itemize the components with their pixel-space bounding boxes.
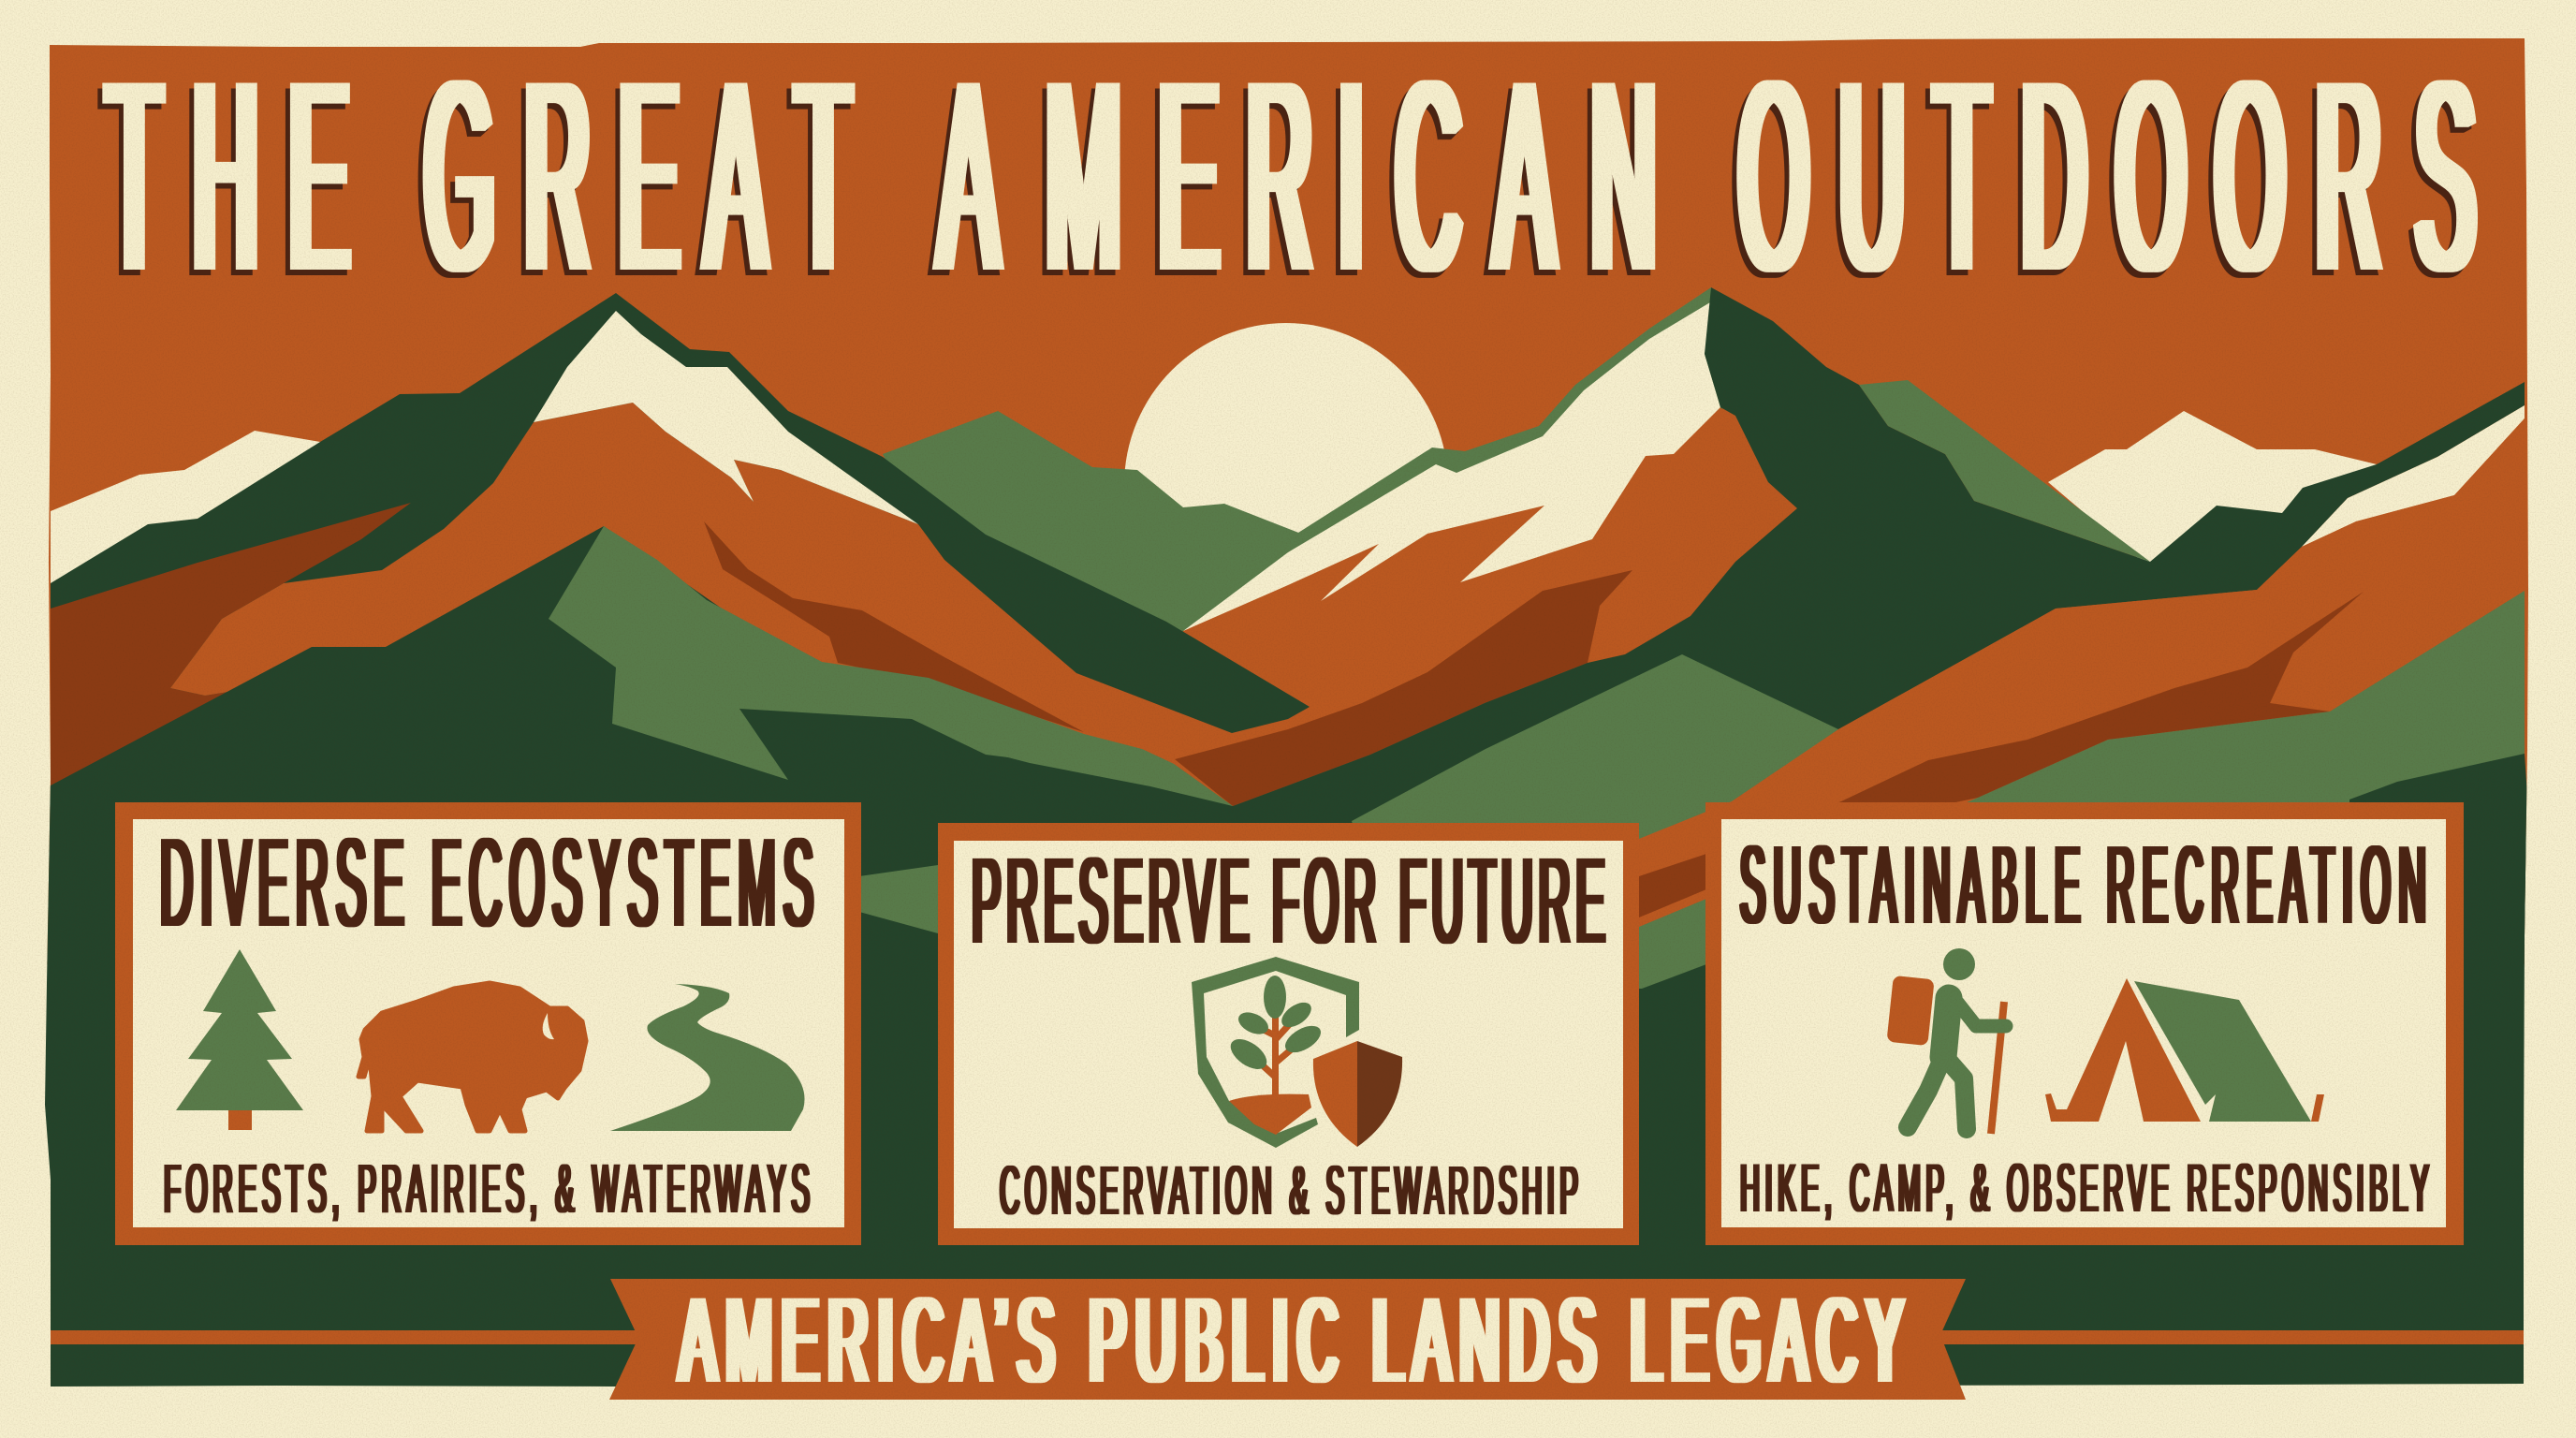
card face (1721, 819, 2446, 1227)
icon: river (610, 984, 805, 1131)
dark green base ground (37, 287, 2537, 1395)
centre lower green hill (1352, 654, 1966, 989)
right stripe (1928, 1330, 2537, 1344)
right mountain rust shadow (1639, 592, 2364, 917)
caption: hike, camp, observe responsibly: HIKE, CAMP, & OBSERVE RESPONSIBLY (1740, 1150, 2429, 1226)
far left snowy peak (51, 431, 320, 583)
ribbon shape (609, 1279, 1966, 1400)
left front green mountain (549, 526, 1233, 806)
sun (1125, 323, 1444, 533)
caption: forests, prairies, waterways: FORESTS, PRAIRIES, & WATERWAYS (164, 1150, 810, 1227)
centre mountain green edge (1298, 287, 1722, 539)
left mountain dark ridge (51, 293, 1310, 749)
right mountain orange mass (1639, 418, 2525, 927)
card border (938, 823, 1639, 1245)
panel: diverse ecosystems (115, 802, 861, 1245)
lower right dark hill (2349, 754, 2537, 936)
left mountain snow cap (534, 311, 918, 524)
card border (115, 802, 861, 1245)
right green slope (1859, 380, 2150, 562)
panel: sustainable recreation (1705, 802, 2464, 1245)
heading: preserve for future: PRESERVE FOR FUTURE (972, 832, 1605, 969)
left far dark rust slope (51, 503, 411, 785)
left stripe (37, 1330, 646, 1344)
card face (133, 819, 844, 1227)
icon: bison (359, 983, 586, 1131)
left mountain rust streak (704, 521, 1084, 732)
left mountain orange mass (170, 403, 1232, 796)
ribbon banner (609, 1273, 1966, 1408)
heading: sustainable recreation: SUSTAINABLE RECREATION (1740, 823, 2426, 946)
right front green hill (1872, 591, 2525, 843)
far right snow strip (2302, 405, 2525, 547)
caption: conservation and stewardship: CONSERVATION & STEWARDSHIP (1000, 1152, 1578, 1229)
icon: hiker (1886, 948, 2006, 1134)
centre mountain dark rust shadow (1175, 570, 1632, 806)
title: THE GREAT AMERICAN OUTDOORS (107, 24, 2475, 328)
icon: conservation shield with sapling (1192, 957, 1402, 1148)
centre mountain orange mass (1183, 407, 1722, 647)
left front green tail (975, 749, 1233, 806)
green band behind card gap (859, 865, 938, 933)
heading: diverse ecosystems: DIVERSE ECOSYSTEMS (160, 813, 813, 953)
panel: preserve for future (938, 823, 1639, 1245)
centre mountain snow (1183, 300, 1720, 631)
far centre green mountain (883, 411, 1298, 631)
card border (1705, 802, 2464, 1245)
banner text: AMERICA’S PUBLIC LANDS LEGACY (680, 1273, 1903, 1408)
orange sky (37, 28, 2546, 964)
icon: tent (2045, 978, 2324, 1122)
right snowy peak (2048, 411, 2377, 571)
icon: pine tree (176, 949, 303, 1130)
card face (954, 841, 1623, 1228)
